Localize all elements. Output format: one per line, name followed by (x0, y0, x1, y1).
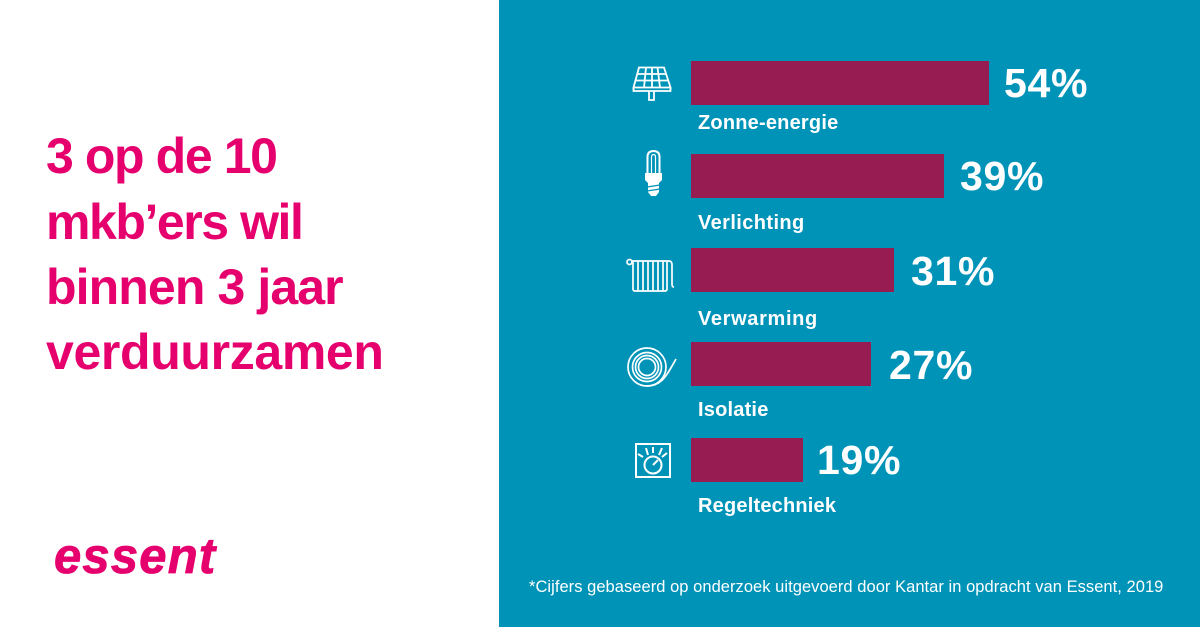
logo: essent: essent (54, 528, 216, 584)
label: Zonne-energie: Zonne-energie (698, 112, 838, 134)
icon: radiator (626, 258, 674, 292)
value: 39%: 39% (960, 153, 1044, 199)
heading (46, 128, 384, 380)
bar row: Verwarming (626, 248, 995, 330)
value: 31%: 31% (911, 248, 995, 294)
bar: 54% (691, 61, 989, 105)
bar row: Isolatie (627, 342, 973, 421)
bar row: Zonne-energie (632, 60, 1088, 134)
bar: 19% (691, 438, 803, 482)
heading: binnen 3 jaar (46, 259, 343, 315)
value: 19%: 19% (817, 437, 901, 483)
icon: solar panel (632, 66, 672, 101)
footnote: *Cijfers gebaseerd op onderzoek uitgevoerd door Kantar in opdracht van Essent, 2019 (529, 578, 1163, 596)
bar: 31% (691, 248, 894, 292)
bar row: Verlichting (645, 150, 1044, 234)
bar: 39% (691, 154, 944, 198)
value: 54%: 54% (1004, 60, 1088, 106)
label: Regeltechniek: Regeltechniek (698, 495, 836, 517)
label: Isolatie: Isolatie (698, 399, 769, 421)
label: Verlichting: Verlichting (698, 212, 805, 234)
panel: blue background (499, 0, 1200, 627)
heading: mkb’ers wil (46, 194, 302, 250)
label: Verwarming: Verwarming (698, 308, 818, 330)
icon: light bulb (645, 150, 662, 196)
icon: control dial (635, 443, 671, 478)
heading: verduurzamen (46, 324, 384, 380)
value: 27%: 27% (889, 342, 973, 388)
bar: 27% (691, 342, 871, 386)
heading: 3 op de 10 (46, 128, 277, 184)
icon: insulation roll (627, 347, 677, 387)
bar row: Regeltechniek (635, 437, 901, 517)
